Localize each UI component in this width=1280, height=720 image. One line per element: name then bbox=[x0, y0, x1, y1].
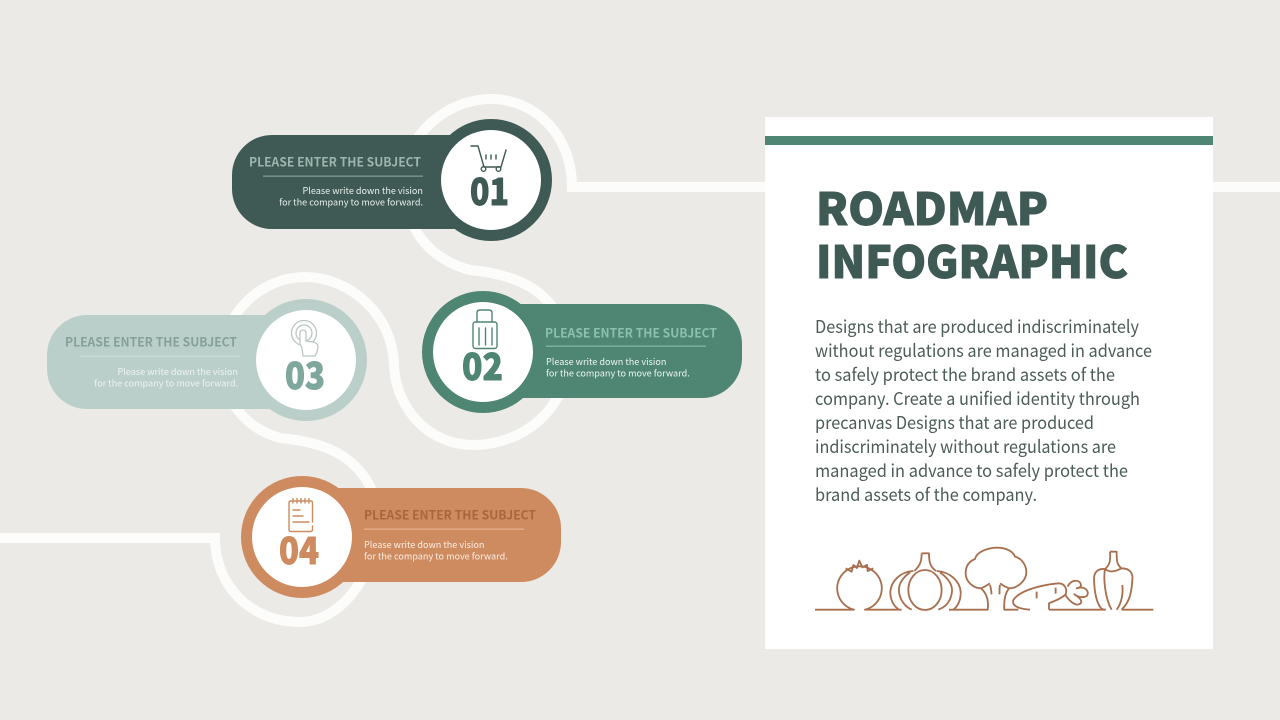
step 2 heading: PLEASE ENTER THE SUBJECT bbox=[545, 322, 717, 342]
icon: touch bbox=[292, 320, 318, 356]
step 1 description: for the company to move forward. bbox=[279, 194, 423, 208]
step 1 description: Please write down the vision bbox=[303, 183, 423, 197]
panel background bbox=[765, 117, 1213, 649]
icon: vegetables line art bbox=[815, 548, 1153, 610]
step 1 number: 01 bbox=[470, 162, 509, 216]
step 2 description: Please write down the vision bbox=[546, 354, 666, 368]
step 1 ring bbox=[430, 119, 552, 241]
step 4 description: for the company to move forward. bbox=[364, 548, 508, 562]
body text: Designs that are produced indiscriminately bbox=[815, 314, 1139, 339]
step 3 heading: PLEASE ENTER THE SUBJECT bbox=[65, 332, 237, 350]
step 3 pill bbox=[47, 315, 307, 409]
step 4 heading: PLEASE ENTER THE SUBJECT bbox=[364, 504, 536, 524]
step 2 pill bbox=[482, 304, 742, 398]
body text: indiscriminately without regulations are bbox=[815, 434, 1116, 459]
panel: roadmap description bbox=[765, 117, 1213, 649]
body text: precanvas Designs that are produced bbox=[815, 410, 1094, 435]
step 3 inner circle bbox=[256, 310, 356, 410]
title: INFOGRAPHIC bbox=[816, 227, 1128, 291]
step 2 number: 02 bbox=[462, 337, 503, 391]
roadmap path bbox=[0, 99, 1280, 622]
icon: shopping cart bbox=[471, 146, 506, 171]
step 1 bbox=[232, 119, 552, 241]
step 4 rule bbox=[364, 528, 524, 530]
step 4 pill bbox=[301, 488, 561, 582]
step 3 bbox=[47, 299, 367, 421]
step 1 inner circle bbox=[441, 130, 541, 230]
step 2 inner circle bbox=[433, 302, 533, 402]
icon: luggage bbox=[473, 310, 497, 348]
panel top bar bbox=[765, 136, 1213, 145]
body text: company. Create a unified identity through bbox=[815, 386, 1140, 411]
title: ROADMAP bbox=[816, 174, 1048, 238]
step 4 ring bbox=[241, 476, 363, 598]
step 4 number: 04 bbox=[279, 521, 319, 575]
step 3 ring bbox=[245, 299, 367, 421]
step 3 rule bbox=[80, 356, 240, 357]
body text: to safely protect the brand assets of the bbox=[815, 362, 1115, 387]
step 3 description: for the company to move forward. bbox=[94, 375, 238, 389]
step 1 rule bbox=[263, 176, 423, 177]
body text: without regulations are managed in advance bbox=[815, 338, 1152, 363]
step 2 description: for the company to move forward. bbox=[546, 365, 690, 379]
body text: brand assets of the company. bbox=[815, 482, 1037, 507]
step 2 rule bbox=[546, 346, 706, 347]
step 4 inner circle bbox=[252, 487, 352, 587]
step 3 number: 03 bbox=[285, 346, 325, 400]
step 1 heading: PLEASE ENTER THE SUBJECT bbox=[249, 152, 421, 170]
step 2 bbox=[422, 291, 742, 413]
step 2 ring bbox=[422, 291, 544, 413]
body text: managed in advance to safely protect the bbox=[815, 458, 1128, 483]
step 4 description: Please write down the vision bbox=[364, 537, 484, 551]
step 4 bbox=[241, 476, 561, 598]
icon: notepad bbox=[289, 498, 312, 532]
step 1 pill bbox=[232, 135, 492, 229]
step 3 description: Please write down the vision bbox=[118, 364, 238, 378]
